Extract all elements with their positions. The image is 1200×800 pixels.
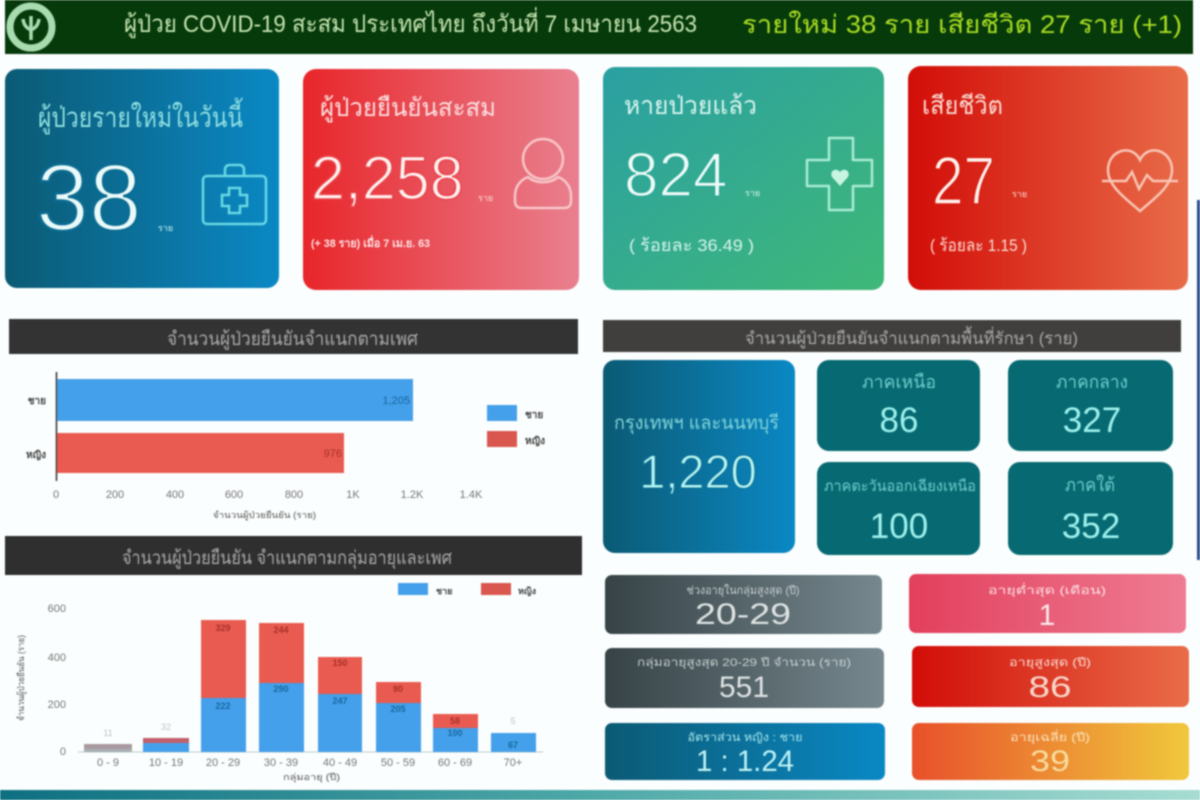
stat: peak group count: 551 <box>719 671 769 704</box>
bar value labels <box>103 623 518 750</box>
legend: age chart <box>398 583 536 597</box>
unit: ราย <box>478 193 493 203</box>
region: North: ภาคเหนือ <box>862 372 936 392</box>
bar: male <box>57 379 413 421</box>
bar chart <box>26 372 483 521</box>
new cases value: 38 <box>36 145 142 251</box>
stat: youngest age: 1 <box>1039 599 1055 632</box>
card title: ผู้ป่วยยืนยันสะสม <box>320 94 496 123</box>
stat: oldest age: อายุสูงสุด (ปี) <box>1009 656 1091 669</box>
bar value labels: 58 <box>450 716 460 726</box>
x axis title: กลุ่มอายุ (ปี) <box>283 772 340 783</box>
cumulative value: 2,258 <box>311 144 464 212</box>
stat: peak age group: ช่วงอายุในกลุ่มสูงสุด (ปี) <box>686 584 800 597</box>
bar value labels: 290 <box>273 684 289 694</box>
stat: female to male ratio: อัตราส่วน หญิง : ชาย <box>688 732 802 744</box>
legend: age chart: หญิง <box>518 586 536 597</box>
age category labels: 60 - 69 <box>438 757 472 769</box>
icon: first aid kit <box>203 165 266 224</box>
header title: ผู้ป่วย COVID-19 สะสม ประเทศไทย ถึงวันที่ 7 เมษายน 2563 <box>124 7 697 39</box>
stat: peak age group: 20-29 <box>695 598 791 631</box>
region: South <box>1008 462 1173 555</box>
stat: female to male ratio <box>605 723 885 780</box>
stat: oldest age: 86 <box>1028 671 1072 704</box>
value axis ticks <box>53 489 483 501</box>
value axis ticks: 1.4K <box>460 489 483 501</box>
daily increase note: (+ 38 ราย) เมื่อ 7 เม.ย. 63 <box>311 235 430 250</box>
unit: ราย <box>1012 189 1027 199</box>
panel: recovered <box>603 67 884 290</box>
y axis title: จำนวนผู้ป่วยยืนยัน (ราย) <box>16 635 27 721</box>
category labels <box>26 396 46 461</box>
unit: ราย <box>158 223 173 233</box>
deaths value: 27 <box>932 143 995 219</box>
value axis ticks: 400 <box>166 489 184 501</box>
region: South: ภาคใต้ <box>1065 474 1115 495</box>
recovered value: 824 <box>624 141 727 210</box>
bars: female <box>84 620 478 749</box>
unit: ราย <box>745 188 760 198</box>
panel: cases by treatment region <box>603 320 1181 555</box>
card title: ผู้ป่วยรายใหม่ในวันนี้ <box>38 97 243 135</box>
header daily summary: รายใหม่ 38 ราย เสียชีวิต 27 ราย (+1) <box>742 10 1182 39</box>
icon: heart with pulse <box>1102 150 1178 211</box>
y axis ticks <box>48 603 66 758</box>
bar value labels: 329 <box>215 623 231 633</box>
bar value labels: 205 <box>390 704 406 714</box>
bar value labels: 244 <box>273 625 289 635</box>
legend: age chart: ชาย <box>436 586 452 596</box>
section heading: จำนวนผู้ป่วยยืนยัน จำแนกตามกลุ่มอายุและเพศ <box>122 548 452 570</box>
age category labels: 10 - 19 <box>149 757 183 769</box>
y axis ticks: 400 <box>48 652 66 664</box>
stat: mean age: อายุเฉลี่ย (ปี) <box>1010 729 1090 744</box>
age category labels: 70+ <box>504 757 522 769</box>
stat: youngest age: อายุต่ำสุด (เดือน) <box>988 582 1106 597</box>
category labels: ชาย <box>28 396 46 407</box>
bottom band <box>0 790 1200 800</box>
bar: male: 1,205 <box>382 395 410 407</box>
stat: female to male ratio: 1 : 1.24 <box>696 745 794 778</box>
deaths percent: ( ร้อยละ 1.15 ) <box>930 236 1027 255</box>
bar value labels: 5 <box>510 716 516 726</box>
header banner <box>5 0 1193 54</box>
category labels: หญิง <box>26 449 46 461</box>
region: Central <box>1008 360 1173 451</box>
age category labels: 20 - 29 <box>206 757 240 769</box>
region: South: 352 <box>1062 507 1120 546</box>
section heading: จำนวนผู้ป่วยยืนยันจำแนกตามเพศ <box>167 329 418 350</box>
recovered percent: ( ร้อยละ 36.49 ) <box>629 236 754 255</box>
panel: new cases today <box>5 69 279 288</box>
region: Northeast <box>817 462 980 555</box>
section heading <box>5 536 582 575</box>
bar value labels: 150 <box>332 658 348 668</box>
panel: cases by age and gender <box>5 536 582 783</box>
value axis ticks: 200 <box>106 489 124 501</box>
bar value labels: 100 <box>447 728 463 738</box>
icon: medical cross with heart <box>807 138 872 210</box>
section heading: จำนวนผู้ป่วยยืนยันจำแนกตามพื้นที่รักษา (ราย) <box>745 326 1078 349</box>
bar: female: 976 <box>324 448 342 460</box>
region: Northeast: ภาคตะวันออกเฉียงเหนือ <box>824 478 976 495</box>
region: Central: ภาคกลาง <box>1056 372 1128 392</box>
age category labels: 50 - 59 <box>381 757 415 769</box>
y axis ticks: 0 <box>60 746 66 758</box>
bar value labels: 90 <box>393 684 403 694</box>
age category labels: 40 - 49 <box>323 757 357 769</box>
region: Bangkok and Nonthaburi: กรุงเทพฯ และนนทบุรี <box>614 412 779 435</box>
region: Central: 327 <box>1063 401 1121 440</box>
bars: male <box>84 683 536 752</box>
section heading <box>603 320 1181 352</box>
y axis ticks: 200 <box>48 699 66 711</box>
icon: department logo <box>10 6 52 48</box>
panel: cases by gender <box>9 319 578 521</box>
stat: peak group count <box>605 648 884 708</box>
age category labels <box>97 757 522 769</box>
value axis ticks: 1.2K <box>401 489 424 501</box>
bar value labels: 32 <box>161 722 171 732</box>
stat: peak group count: กลุ่มอายุสูงสุด 20-29 ปี จำนวน (ราย) <box>637 656 851 669</box>
stacked bar chart <box>16 603 543 783</box>
stat: youngest age <box>909 574 1186 633</box>
stat: mean age: 39 <box>1030 745 1070 778</box>
region: Bangkok and Nonthaburi: 1,220 <box>639 445 757 498</box>
value axis ticks: 0 <box>53 489 59 501</box>
region: North <box>817 360 980 451</box>
value axis ticks: 600 <box>225 489 243 501</box>
card title: เสียชีวิต <box>922 92 1003 120</box>
y axis ticks: 600 <box>48 603 66 615</box>
bar value labels: 222 <box>215 701 231 711</box>
legend: gender: ชาย <box>525 410 543 421</box>
legend: gender <box>487 405 545 447</box>
age category labels: 0 - 9 <box>97 757 119 769</box>
region: North: 86 <box>880 401 918 440</box>
icon: person <box>515 139 571 208</box>
axis title: จำนวนผู้ป่วยยืนยัน (ราย) <box>213 510 316 521</box>
bar value labels: 11 <box>103 728 113 738</box>
bar value labels: 67 <box>508 740 518 750</box>
section heading <box>9 319 578 354</box>
panel: deaths <box>908 66 1188 290</box>
region: Bangkok and Nonthaburi <box>603 360 795 553</box>
bar: female <box>57 433 344 473</box>
region: Northeast: 100 <box>870 507 928 546</box>
bar value labels: 247 <box>332 696 348 706</box>
value axis ticks: 1K <box>346 489 360 501</box>
stat: oldest age <box>912 646 1189 707</box>
panel: cumulative confirmed <box>303 69 579 290</box>
age category labels: 30 - 39 <box>264 757 298 769</box>
legend: gender: หญิง <box>525 435 545 447</box>
card title: หายป่วยแล้ว <box>624 92 757 120</box>
stat: peak age group <box>605 575 882 634</box>
value axis ticks: 800 <box>285 489 303 501</box>
stat: mean age <box>912 723 1189 780</box>
